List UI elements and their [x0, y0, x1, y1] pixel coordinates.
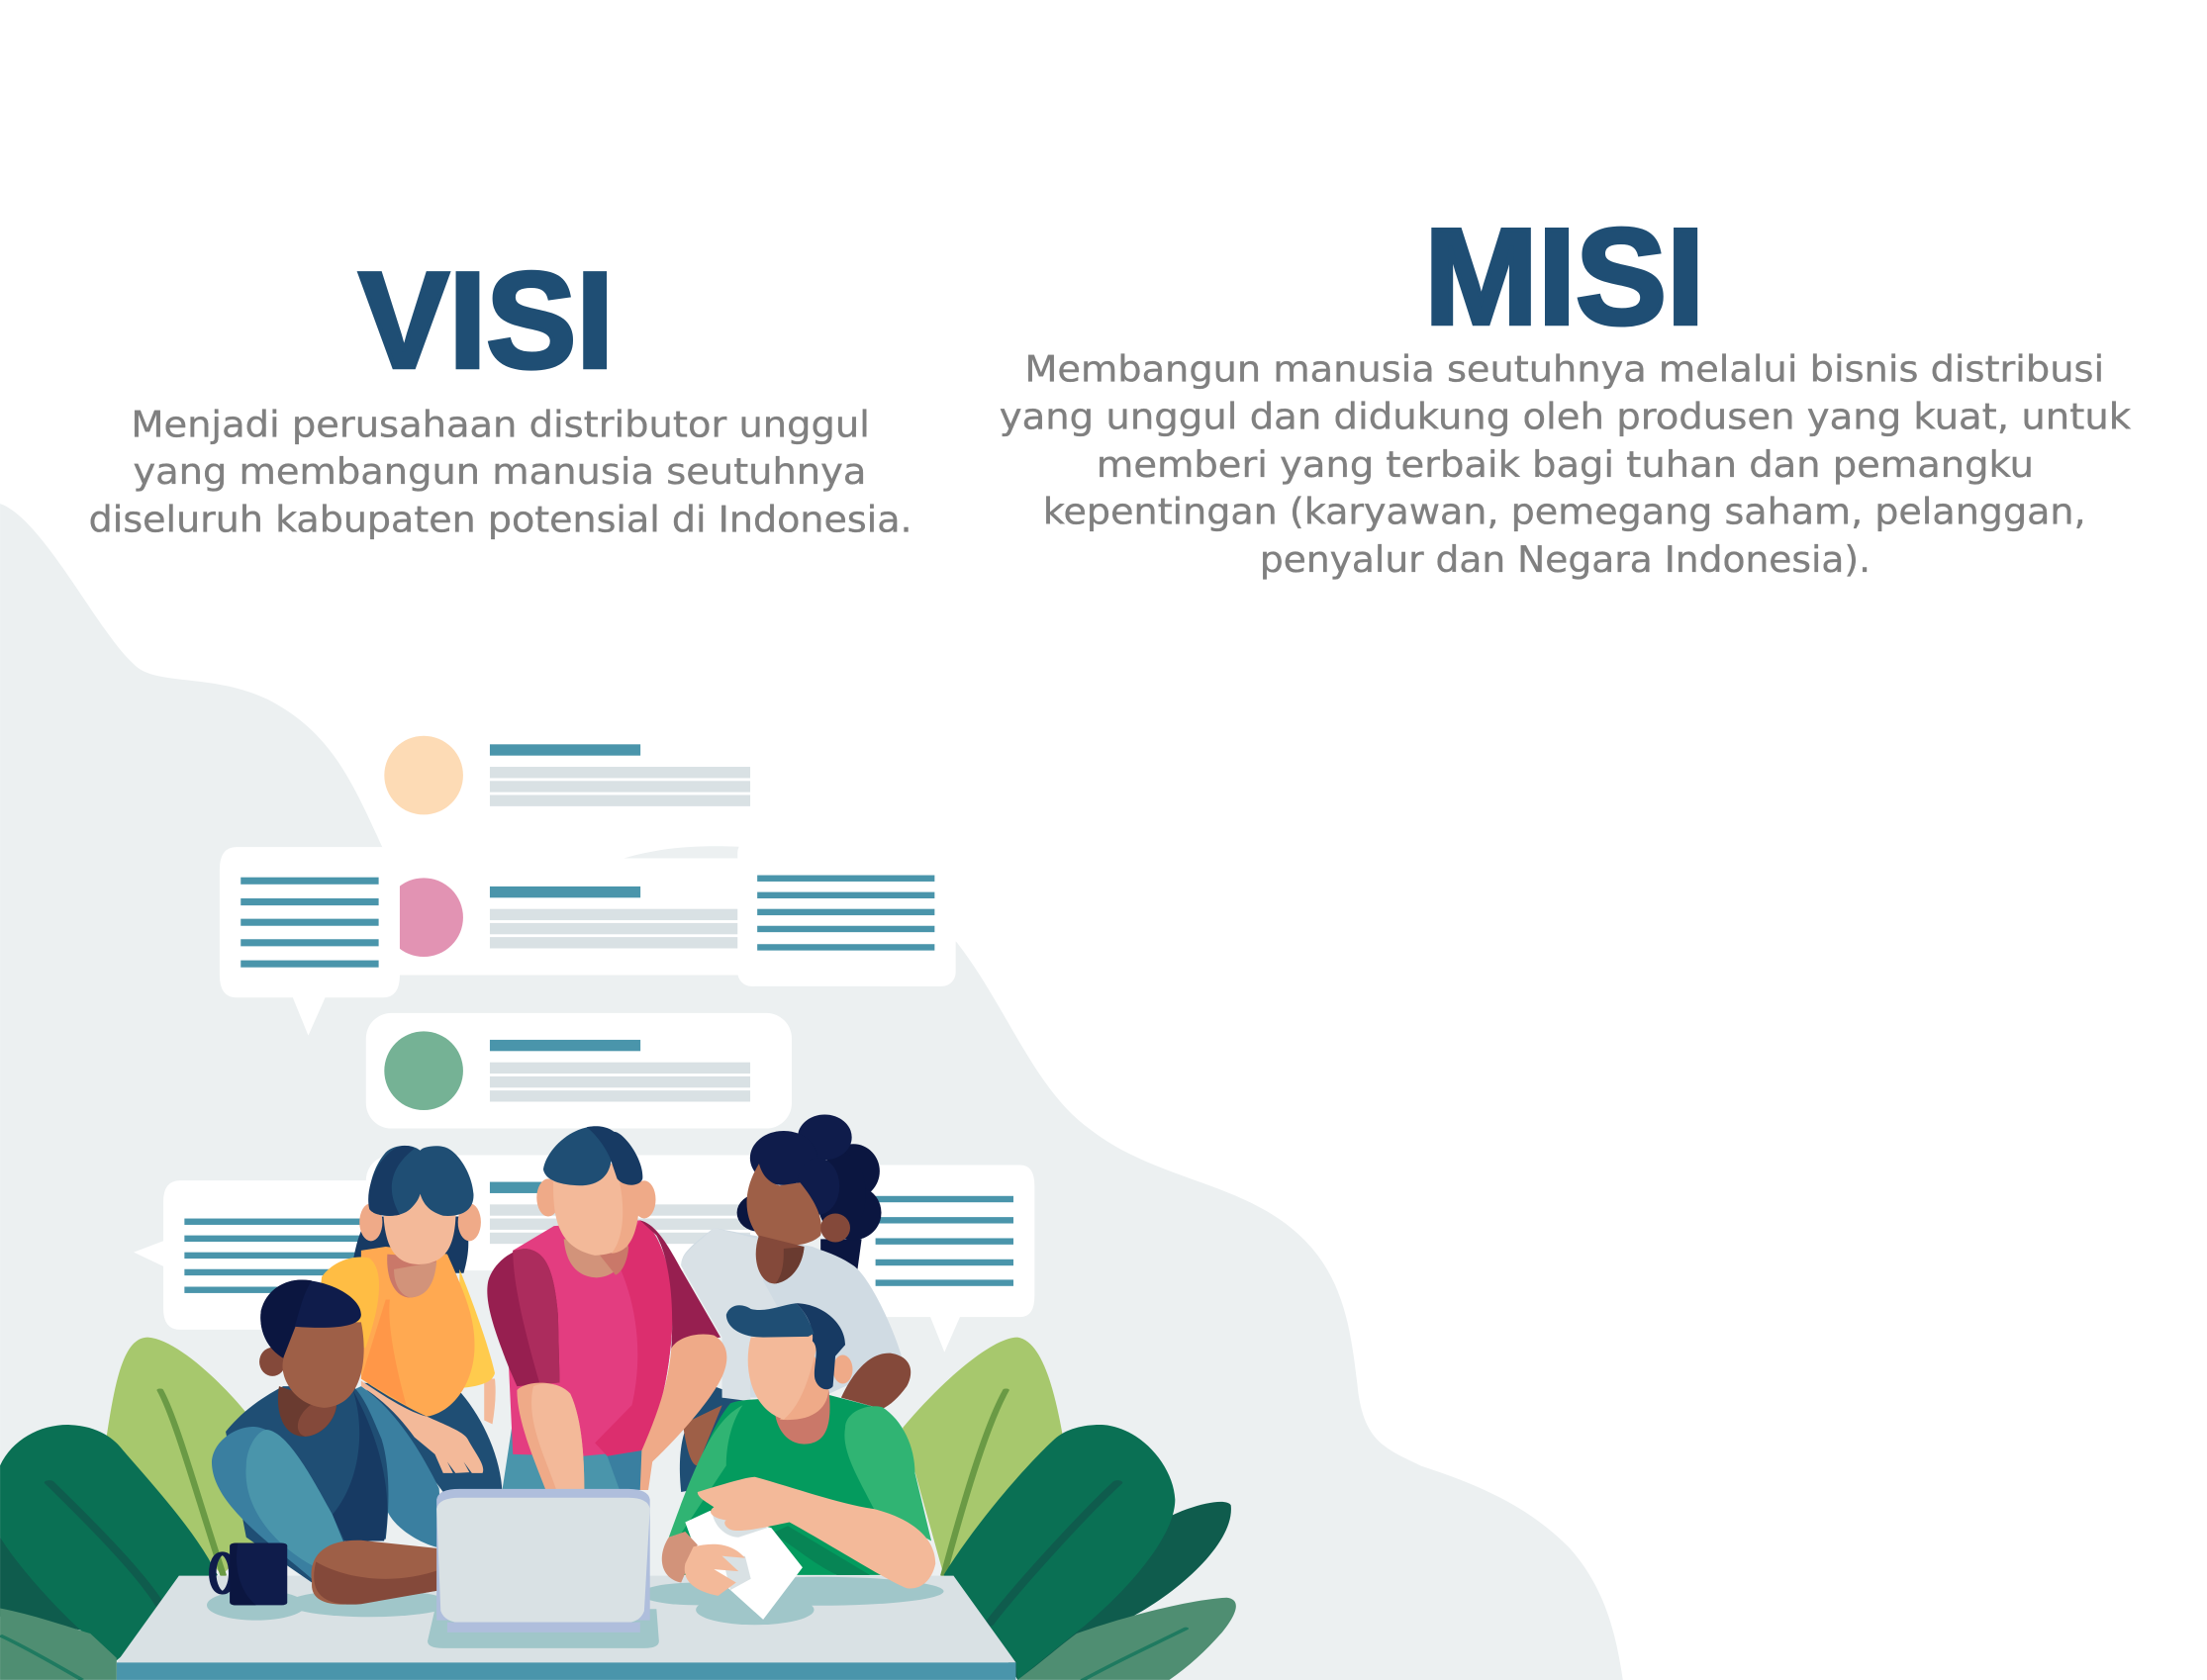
text block: misi	[1000, 347, 2131, 581]
icon: coffee mug	[213, 1542, 287, 1605]
profile card 2	[367, 858, 791, 976]
person: man in blue	[212, 1280, 443, 1605]
text block: misi: Membangun manusia seutuhnya melalui bisnis distribusi	[1024, 347, 2104, 390]
text block: visi: Menjadi perusahaan distributor unggul	[131, 404, 870, 446]
person: woman in white	[680, 1115, 911, 1492]
text block: visi: diseluruh kabupaten potensial di Indonesia.	[89, 499, 912, 541]
text block: misi: yang unggul dan didukung oleh produsen yang kuat, untuk	[1000, 396, 2131, 438]
person: woman in orange	[320, 1146, 502, 1492]
profile card 3	[366, 1013, 792, 1129]
heading: VISI: VISI	[359, 244, 614, 397]
speech bubble: top right	[737, 839, 956, 986]
text block: misi: kepentingan (karyawan, pemegang saham, pelanggan,	[1043, 491, 2086, 533]
illustration: team around laptop	[0, 1115, 1236, 1680]
table	[117, 1576, 1015, 1680]
text block: visi	[89, 404, 912, 541]
speech bubble: lower left	[134, 1180, 380, 1330]
profile card 4	[366, 1156, 791, 1270]
text block: visi: yang membangun manusia seutuhnya	[133, 450, 866, 493]
text block: misi: penyalur dan Negara Indonesia).	[1260, 538, 1871, 581]
profile card 1	[367, 717, 791, 833]
table shadows	[207, 1577, 944, 1648]
text block: misi: memberi yang terbaik bagi tuhan dan pemangku	[1097, 443, 2034, 486]
heading: MISI: MISI	[1424, 201, 1704, 353]
icon: laptop	[436, 1489, 650, 1633]
plants in front	[0, 1598, 1236, 1680]
person: man in green	[662, 1303, 935, 1620]
person: man in pink	[487, 1126, 726, 1490]
speech bubble: top left	[220, 847, 400, 1036]
plants behind table	[0, 1338, 1231, 1680]
speech bubble: lower right	[844, 1166, 1034, 1353]
background blob	[0, 504, 1623, 1680]
